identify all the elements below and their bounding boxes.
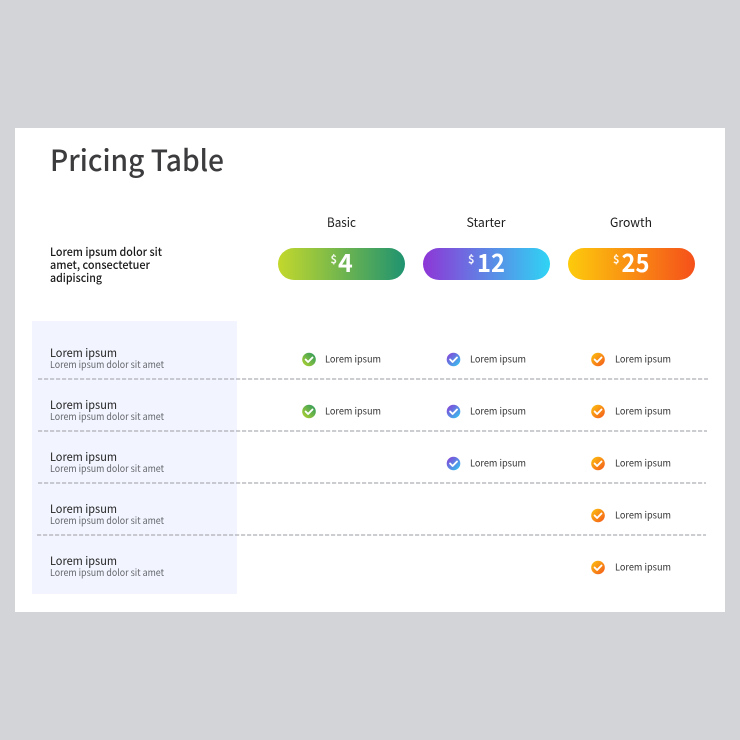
row 1 [50,345,671,371]
row 5 label: Lorem ipsum [50,553,117,569]
plan: Basic: 4 [338,244,353,280]
row 1 Growth check: Lorem ipsum [615,352,671,366]
row 1 Growth check [591,352,671,366]
row 2 Basic check [302,404,381,418]
row 3 label [50,449,164,475]
description text block: amet, consectetuer [50,257,150,273]
row 4 Growth check [591,508,671,522]
plan: Starter: Starter [466,212,506,231]
row 2 label: Lorem ipsum [50,397,117,413]
row 4 Growth check: Lorem ipsum [615,508,671,522]
row 1 Starter check [447,352,526,366]
row 2 Growth check: Lorem ipsum [615,404,671,418]
description text block: Lorem ipsum dolor sit [50,244,162,260]
white card panel [15,128,725,612]
row 5 Growth check [591,560,671,574]
plan: Growth [568,212,695,280]
row 3 Starter check [447,456,526,470]
title: Pricing Table [50,138,224,180]
row 3 Growth check: Lorem ipsum [615,456,671,470]
plan: Basic [278,212,405,280]
plan: Starter [423,212,550,280]
row 1 label: Lorem ipsum [50,345,117,361]
description text block [50,244,162,286]
row 4 label [50,501,164,527]
plan: Growth: 25 [622,244,650,280]
row 1 Starter check: Lorem ipsum [470,352,526,366]
plan: Growth: Growth [610,212,652,231]
row 4 label: Lorem ipsum [50,501,117,517]
row 1 label [50,345,164,371]
description text block: adipiscing [50,270,102,286]
row 1 Basic check: Lorem ipsum [325,352,381,366]
row 4 label: Lorem ipsum dolor sit amet [50,513,164,527]
plan: Basic: $ [330,252,337,268]
row 2 Basic check: Lorem ipsum [325,404,381,418]
row 3 [50,449,671,475]
row 4 [50,501,671,527]
row 2 label: Lorem ipsum dolor sit amet [50,409,164,423]
row 2 Starter check: Lorem ipsum [470,404,526,418]
row 2 Starter check [447,404,526,418]
row 3 label: Lorem ipsum dolor sit amet [50,461,164,475]
plan: Starter: $ [468,252,474,268]
row 1 label: Lorem ipsum dolor sit amet [50,357,164,371]
plan: Growth: $ [613,252,620,268]
row 2 Growth check [591,404,671,418]
row 3 Growth check [591,456,671,470]
row 3 Starter check: Lorem ipsum [470,456,526,470]
row 5 label [50,553,164,579]
row 2 label [50,397,164,423]
row 2 [50,397,671,423]
row 5 [50,553,671,579]
feature column background [32,321,237,594]
plan: Starter: 12 [477,244,505,280]
row 1 Basic check [302,352,381,366]
row 5 label: Lorem ipsum dolor sit amet [50,565,164,579]
row 5 Growth check: Lorem ipsum [615,560,671,574]
row 3 label: Lorem ipsum [50,449,117,465]
plan: Basic: Basic [327,212,357,231]
